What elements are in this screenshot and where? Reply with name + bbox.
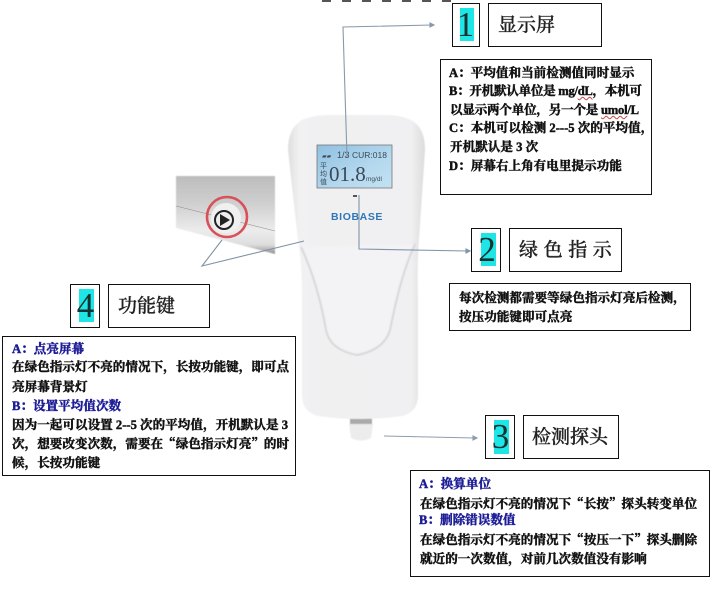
panel: display notes: B：开机默认单位是 mg/dL，本机可 (449, 84, 642, 98)
number badge 4 (70, 284, 100, 328)
brand logo: BIOBASE (331, 211, 383, 223)
screen: 平 (320, 161, 327, 171)
number badge 1 (452, 3, 480, 47)
device body (288, 115, 425, 419)
number badge 4: 4 (77, 286, 94, 325)
panel: probe notes (410, 470, 710, 577)
panel: function key notes: 因为一起可以设置 2--5 次的平均值，开机默认是 3 (12, 418, 288, 432)
screen: CUR:018 (352, 150, 387, 160)
panel: function key notes: ” (251, 433, 264, 452)
panel: green indicator notes (449, 283, 691, 331)
panel: probe notes: ” (609, 493, 622, 512)
screen: ▰▰ (322, 154, 332, 160)
screen: mg/dl (366, 176, 382, 183)
panel: display notes (440, 59, 652, 195)
panel: probe notes: B：删除错误数值 (419, 513, 516, 527)
heading: function key (108, 284, 210, 328)
number badge 2: 2 (478, 230, 496, 269)
heading: green indicator: 绿色指示 (519, 240, 617, 261)
screen: 均 (320, 169, 327, 179)
number badge 1: 1 (457, 5, 474, 44)
arrow: green light (359, 195, 470, 253)
arrow: display (343, 23, 434, 157)
heading: function key: 功能键 (118, 296, 175, 317)
inset: function button (176, 176, 275, 254)
panel: function key notes: “ (163, 433, 176, 452)
indicator light (353, 195, 357, 197)
heading: display: 显示屏 (498, 15, 555, 36)
panel: probe notes: A：换算单位 (419, 477, 491, 491)
screen (317, 145, 392, 188)
panel: probe notes: ” (634, 529, 647, 548)
screen: 1/3 (337, 150, 350, 160)
panel: display notes: C：本机可以检测 2---5 次的平均值， (449, 121, 653, 135)
heading: probe: 检测探头 (532, 427, 608, 448)
panel: probe notes: 在绿色指示灯不亮的情况下 按压一下 探头删除 (420, 533, 697, 547)
panel: function key notes (2, 336, 296, 476)
heading: probe (523, 415, 619, 459)
panel: probe notes: 就近的一次数值，对前几次数值没有影响 (420, 552, 647, 566)
screen: 01.8 (329, 162, 366, 186)
lower clip groove (301, 244, 415, 355)
panel: function key notes: 次，想要改变次数，需要在 绿色指示灯亮 的时 (12, 437, 289, 451)
panel: function key notes: A：点亮屏幕 (12, 342, 84, 356)
panel: probe notes: 在绿色指示灯不亮的情况下 长按 探头转变单位 (420, 497, 697, 511)
arrow: probe (384, 436, 477, 440)
panel: probe notes: “ (571, 493, 584, 512)
panel: display notes: 以显示两个单位，另一个是 umol/L (450, 103, 639, 117)
panel: display notes: A：平均值和当前检测值同时显示 (449, 66, 634, 80)
heading: display (488, 3, 602, 47)
panel: green indicator notes: 每次检测都需要等绿色指示灯亮后检测， (459, 291, 686, 305)
panel: green indicator notes: 按压功能键即可点亮 (459, 310, 572, 324)
heading: green indicator (509, 228, 622, 272)
panel: function key notes: 候，长按功能键 (12, 456, 100, 470)
panel: function key notes: 亮屏幕背景灯 (12, 380, 88, 394)
panel: display notes: 开机默认是 3 次 (450, 140, 538, 154)
number badge 3: 3 (492, 417, 509, 456)
arrow: function key (202, 240, 304, 266)
screen: 值 (320, 177, 327, 187)
probe (349, 418, 373, 440)
panel: probe notes: “ (571, 529, 584, 548)
panel: function key notes: B：设置平均值次数 (12, 399, 121, 413)
cropped title fragment (322, 0, 462, 2)
panel: function key notes: 在绿色指示灯不亮的情况下，长按功能键，即可点 (12, 360, 289, 374)
number badge 2 (471, 228, 501, 272)
number badge 3 (485, 415, 515, 459)
panel: display notes: D：屏幕右上角有电里提示功能 (449, 159, 622, 173)
